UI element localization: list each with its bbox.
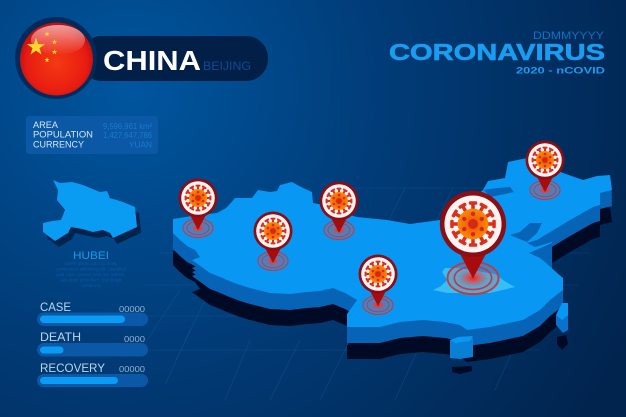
stat: death: DEATH xyxy=(40,330,81,344)
pin: south xyxy=(358,254,398,314)
province description: constructio xyxy=(81,283,102,288)
province description: HUBEI xyxy=(73,250,109,262)
stat: case: 00000 xyxy=(119,305,146,314)
province description: tum dolor primi illam. Duo illegal xyxy=(61,278,121,282)
province description: Lorem ipsum dolor sit amet, xyxy=(64,261,118,266)
map: china isometric xyxy=(173,158,612,374)
panel: country facts: 1,427,647,786 xyxy=(103,131,153,140)
icon: China flag badge xyxy=(15,17,97,99)
panel: country facts: 9,596,961 km² xyxy=(103,122,152,131)
country name: CHINA xyxy=(103,45,201,76)
stat: recovery: 00000 xyxy=(119,365,146,374)
stat: death: 0000 xyxy=(124,335,146,344)
island: Hainan xyxy=(450,336,473,374)
panel: country facts: POPULATION xyxy=(33,130,93,140)
northern border and gulf shading xyxy=(484,187,552,258)
province description xyxy=(56,250,126,288)
pin: central west xyxy=(254,212,292,270)
map: Hubei province xyxy=(43,180,141,247)
highlighted region: Hubei xyxy=(433,268,515,293)
subtitle: 2020 - nCOVID xyxy=(516,65,605,76)
pin: west xyxy=(178,178,218,238)
panel: country facts xyxy=(26,116,158,154)
stat: case xyxy=(37,300,148,326)
title block xyxy=(389,30,605,76)
map top surface xyxy=(173,158,612,330)
date: DDMMYYYY xyxy=(533,30,604,42)
province description: consectetur adipiscing elit. Sed aliud xyxy=(56,266,126,272)
pin: north xyxy=(320,182,358,240)
map shadow xyxy=(173,190,612,362)
pin: north east xyxy=(526,140,564,200)
map side wall xyxy=(173,162,612,346)
panel: country facts: CURRENCY xyxy=(33,139,84,149)
country banner xyxy=(15,17,268,99)
pin: Hubei large xyxy=(440,191,506,294)
stat: recovery xyxy=(37,361,148,387)
panel: country facts: YUAN xyxy=(129,140,152,150)
island: Taiwan xyxy=(556,303,568,350)
stat: recovery: RECOVERY xyxy=(40,361,105,375)
province description: quid video, pretest Sam tum adesse, xyxy=(56,272,126,277)
stat: case: CASE xyxy=(40,300,71,314)
capital: BEIJING xyxy=(203,61,251,73)
stat: death xyxy=(37,330,148,356)
banner pill xyxy=(80,36,268,81)
heading: CORONAVIRUS xyxy=(389,39,605,65)
panel: country facts: AREA xyxy=(33,120,59,130)
